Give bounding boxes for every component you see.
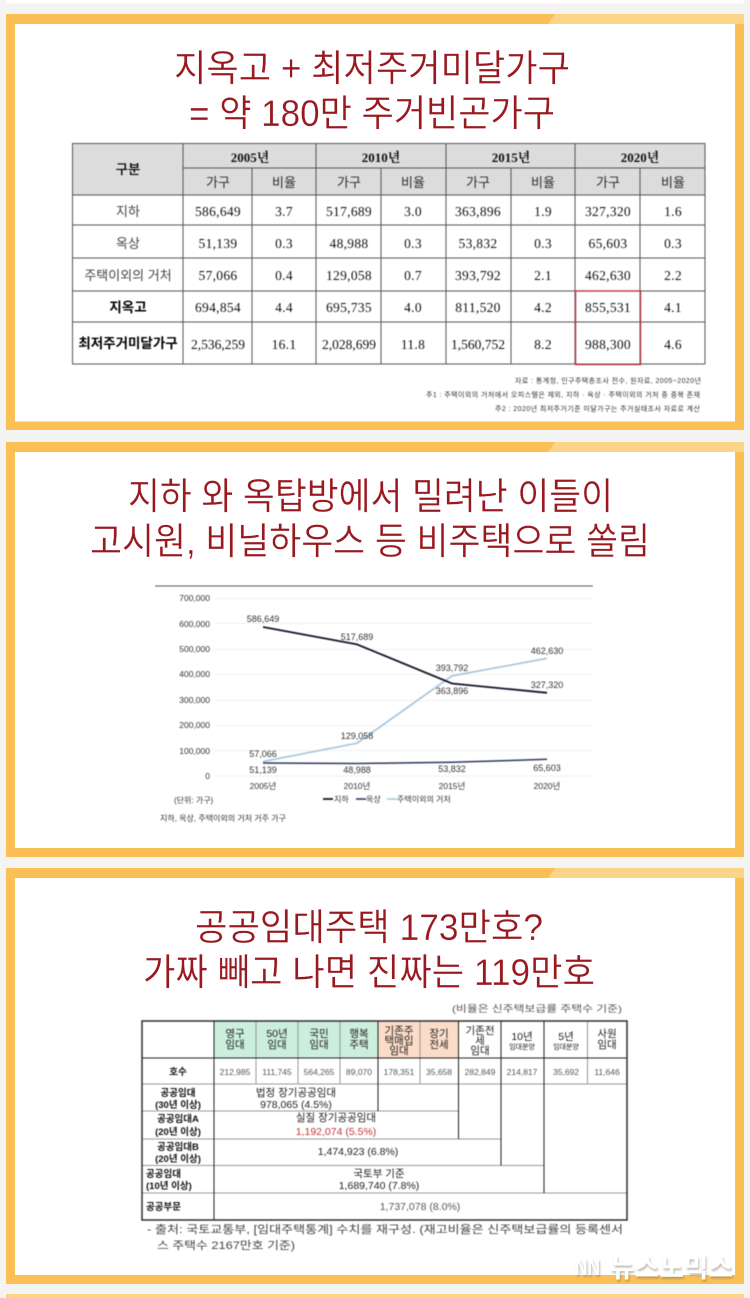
title: panel 3: 공공임대주택 173만호?: [195, 907, 543, 948]
source notes: 주1 : 주택이외의 거처에서 오피스텔은 제외, 지하 · 옥상 · 주택이외의 거처 중 중복 존재: [426, 390, 700, 399]
row labels: (20년 이상): [155, 1153, 201, 1165]
units row: 35,692: [553, 1067, 579, 1077]
source notes: [426, 376, 701, 413]
housing statistics table: 2015년: [492, 150, 530, 165]
housing statistics table: 53,832: [459, 236, 497, 251]
housing statistics table: 0.4: [275, 268, 293, 283]
x axis labels: 2020년: [534, 781, 560, 791]
panel: public rental table: [6, 868, 744, 1284]
title: panel 2: 지하 와 옥탑방에서 밀려난 이들이: [128, 476, 613, 517]
legend: 옥상: [366, 794, 381, 804]
source notes: 자료 : 통계청, 인구주택총조사 전수, 원자료, 2005~2020년: [515, 376, 701, 385]
housing statistics table: 363,896: [455, 204, 501, 219]
housing statistics table: 1.9: [534, 204, 552, 219]
callout: red highlight box: [576, 291, 640, 364]
housing statistics table: 129,058: [326, 268, 372, 283]
housing statistics table: 51,139: [199, 236, 237, 251]
table header labels: 기존주: [385, 1025, 414, 1037]
housing statistics table: 57,066: [199, 268, 237, 283]
row labels: [146, 1087, 201, 1213]
data labels: 57,066: [249, 749, 277, 759]
row labels: 공공임대: [161, 1087, 195, 1099]
title: panel 3: [143, 907, 595, 993]
title: panel 1: = 약 180만 주거빈곤가구: [189, 93, 555, 134]
merged value cells: 실질 장기공공임대: [296, 1111, 376, 1124]
source note: - 출처: 국토교통부, [임대주택통계] 수치를 재구성. (재고비율은 신주택보급률의 등록센서: [147, 1223, 623, 1236]
merged value cells: 1,689,740 (7.8%): [339, 1180, 419, 1192]
line chart: households by residence type: [155, 586, 593, 823]
y axis labels: 0: [205, 771, 210, 781]
merged value cells: 1,737,078 (8.0%): [380, 1201, 460, 1213]
housing statistics table: 4.1: [664, 300, 682, 315]
housing statistics table: 비율: [661, 175, 685, 190]
housing statistics table: 지하: [116, 204, 140, 219]
table header labels: 주택: [349, 1039, 369, 1051]
data labels: 129,058: [341, 731, 373, 741]
data labels: 363,896: [436, 686, 468, 696]
housing statistics table: 694,854: [195, 300, 241, 315]
data labels: 462,630: [531, 646, 563, 656]
housing statistics table: 988,300: [585, 337, 631, 352]
legend: [323, 794, 451, 804]
housing statistics table: 4.6: [664, 337, 682, 352]
table header labels: 국민: [309, 1028, 329, 1040]
housing statistics table: 4.0: [404, 300, 422, 315]
housing statistics table: 2,028,699: [322, 337, 376, 352]
data labels: 393,792: [436, 663, 468, 673]
table header labels: 임대: [225, 1038, 245, 1051]
housing statistics table: 65,603: [589, 236, 627, 251]
table header labels: 영구: [225, 1028, 245, 1040]
data labels: 65,603: [533, 763, 561, 773]
housing statistics table: 48,988: [330, 236, 368, 251]
x axis labels: 2005년: [250, 781, 276, 791]
merged value cells: 국토부 기준: [353, 1168, 405, 1180]
y axis labels: 700,000: [179, 593, 210, 603]
table header labels: 5년: [558, 1031, 574, 1043]
merged value cells: 법정 장기공공임대: [256, 1086, 336, 1099]
series: 옥상: [263, 759, 547, 764]
table header labels: 50년: [266, 1028, 288, 1040]
housing statistics table: 8.2: [534, 337, 552, 352]
table header labels: 임대: [389, 1044, 409, 1057]
next panel edge: [6, 1294, 744, 1298]
housing statistics table: 4.2: [534, 300, 552, 315]
legend: 지하: [334, 794, 349, 804]
units row: 11,646: [594, 1067, 620, 1077]
x axis labels: [250, 781, 560, 791]
y axis labels: [179, 593, 210, 781]
table header labels: 전세: [429, 1039, 449, 1051]
housing statistics table: 0.3: [275, 236, 293, 251]
y axis labels: 500,000: [179, 644, 210, 654]
housing statistics table: 11.8: [401, 337, 425, 352]
housing statistics table: 가구: [466, 175, 490, 190]
housing statistics table: 327,320: [585, 204, 631, 219]
table header labels: 세: [475, 1035, 485, 1047]
units row: [169, 1067, 620, 1078]
data labels: 51,139: [249, 765, 277, 775]
row labels: 공공부문: [146, 1202, 181, 1213]
housing statistics table: 4.4: [275, 300, 293, 315]
table header labels: 행복: [349, 1028, 369, 1040]
title: panel 1: [174, 48, 570, 134]
row labels: 공공임대: [146, 1168, 181, 1180]
units row: 212,985: [220, 1067, 251, 1077]
title: panel 1: 지옥고 + 최저주거미달가구: [174, 48, 570, 89]
units row: 89,070: [346, 1067, 372, 1077]
table header labels: 임대: [267, 1038, 287, 1051]
panel: 지옥고 table: [6, 14, 744, 430]
units row: 호수: [169, 1067, 187, 1078]
x axis labels: 2010년: [344, 781, 370, 791]
chart caption: 지하, 옥상, 주택이외의 거처 거주 가구: [160, 813, 286, 823]
housing statistics table: 517,689: [326, 204, 372, 219]
merged value cells: 1,192,074 (5.5%): [296, 1126, 376, 1138]
source note: [147, 1223, 623, 1252]
housing statistics table: 462,630: [585, 268, 631, 283]
housing statistics table: 가구: [337, 175, 361, 190]
housing statistics table: 586,649: [195, 204, 241, 219]
source notes: 주2 : 2020년 최저주거기준 미달가구는 주거실태조사 자료로 계산: [495, 404, 701, 413]
housing statistics table: 16.1: [272, 337, 296, 352]
housing statistics table: 가구: [596, 175, 620, 190]
housing statistics table: 0.3: [404, 236, 422, 251]
units row: 214,817: [507, 1067, 538, 1077]
y axis labels: 600,000: [179, 619, 210, 629]
public rental housing table: [142, 1021, 627, 1220]
row labels: 공공임대B: [157, 1141, 199, 1153]
units row: 564,265: [304, 1067, 335, 1077]
row labels: (20년 이상): [155, 1126, 201, 1138]
housing statistics table: 구분: [116, 162, 140, 177]
units row: 282,849: [465, 1067, 496, 1077]
housing statistics table: 3.7: [275, 204, 293, 219]
table header labels: 택매입: [385, 1034, 413, 1047]
title: panel 2: [90, 476, 650, 562]
table header labels: 임대: [309, 1038, 329, 1051]
row labels: (30년 이상): [155, 1099, 201, 1111]
housing statistics table: 855,531: [585, 300, 631, 315]
row labels: (10년 이상): [146, 1180, 192, 1192]
housing statistics table: 2.1: [534, 268, 552, 283]
housing statistics table: 비율: [272, 175, 296, 190]
panel: line chart: [6, 442, 744, 857]
watermark: news logo: NN: [575, 1254, 600, 1280]
units row: 111,745: [262, 1067, 292, 1077]
table header labels: 장기: [429, 1028, 449, 1040]
housing statistics table: 1.6: [664, 204, 682, 219]
housing statistics table: 2.2: [664, 268, 682, 283]
data labels: 586,649: [247, 614, 279, 624]
housing statistics table: 0.7: [404, 268, 422, 283]
housing statistics table: 393,792: [455, 268, 501, 283]
watermark: news logo: 뉴스노믹스: [610, 1253, 733, 1283]
housing statistics table: 1,560,752: [451, 337, 505, 352]
units row: 35,658: [426, 1067, 452, 1077]
merged value cells: 1,474,923 (6.8%): [318, 1146, 398, 1158]
table header labels: 임대: [470, 1044, 490, 1057]
title: panel 3: 가짜 빼고 나면 진짜는 119만호: [143, 952, 595, 993]
y axis labels: 200,000: [179, 720, 210, 730]
legend: 주택이외의 거처: [397, 794, 451, 804]
merged value cells: [256, 1086, 460, 1213]
housing statistics table: 비율: [531, 175, 555, 190]
housing statistics table: [72, 143, 705, 364]
y axis labels: 300,000: [179, 695, 210, 705]
housing statistics table: 가구: [206, 175, 230, 190]
units row: 178,351: [384, 1067, 415, 1077]
table header labels: 임대분양: [553, 1043, 579, 1051]
housing statistics table: 최저주거미달가구: [78, 336, 178, 351]
data labels: 48,988: [343, 765, 371, 775]
series: 주택이외의 거처: [263, 658, 547, 762]
title: panel 2: 고시원, 비닐하우스 등 비주택으로 쏠림: [90, 521, 650, 562]
housing statistics table: 비율: [401, 175, 425, 190]
table header labels: 기존전: [466, 1025, 494, 1037]
data labels: 517,689: [341, 632, 373, 642]
table header labels: 임대분양: [509, 1043, 535, 1051]
housing statistics table: 3.0: [404, 204, 422, 219]
table header labels: 임대: [597, 1038, 617, 1051]
data labels: 53,832: [438, 764, 466, 774]
data labels: 327,320: [531, 680, 563, 690]
housing statistics table: 2,536,259: [191, 337, 245, 352]
unit label: (단위: 가구): [174, 795, 214, 805]
y axis labels: 100,000: [179, 746, 210, 756]
housing statistics table: 2005년: [231, 150, 269, 165]
row labels: 공공임대A: [157, 1113, 199, 1125]
housing statistics table: 0.3: [534, 236, 552, 251]
series: 지하: [263, 627, 547, 693]
data labels: [247, 614, 563, 775]
housing statistics table: 695,735: [326, 300, 372, 315]
housing statistics table: 811,520: [455, 300, 501, 315]
source note: 스 주택수 2167만호 기준): [157, 1239, 295, 1252]
housing statistics table: 2020년: [621, 150, 659, 165]
housing statistics table: 옥상: [116, 236, 140, 251]
ratio basis note: (비율은 신주택보급률 주택수 기준): [452, 1004, 622, 1015]
housing statistics table: 2010년: [362, 150, 400, 165]
housing statistics table: 지옥고: [109, 300, 147, 315]
x axis labels: 2015년: [439, 781, 465, 791]
table header labels: [225, 1025, 617, 1057]
table header labels: 사원: [597, 1028, 617, 1040]
merged value cells: 978,065 (4.5%): [260, 1099, 332, 1111]
y axis labels: 400,000: [179, 669, 210, 679]
table header labels: 10년: [511, 1031, 533, 1043]
housing statistics table: 주택이외의 거처: [84, 268, 172, 283]
housing statistics table: 0.3: [664, 236, 682, 251]
